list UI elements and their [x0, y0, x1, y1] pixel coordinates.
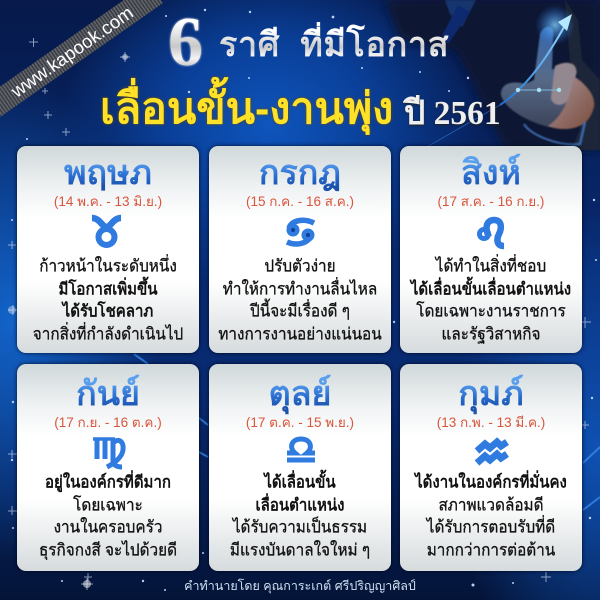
sign name	[209, 150, 391, 196]
description: ทางการงานอย่างแน่นอน	[218, 325, 382, 343]
icon: cancer	[286, 218, 316, 247]
description: สภาพแวดล้อมดี	[438, 496, 544, 515]
watermark ribbon	[0, 0, 163, 120]
description: ปีนี้จะมีเรื่องดี ๆ	[250, 302, 350, 321]
description: ได้เลื่อนขั้น	[264, 473, 336, 492]
sign name	[209, 371, 391, 417]
sign name	[17, 371, 199, 417]
panel: กุมภ์	[400, 364, 582, 571]
description: ก้าวหน้าในระดับหนึ่ง	[39, 257, 177, 275]
description: มีแรงบันดาลใจใหม่ ๆ	[230, 541, 370, 560]
description: จากสิ่งที่กำลังดำเนินไป	[33, 325, 183, 343]
sign name: สิงห์	[461, 154, 521, 192]
date range: (17 ก.ย. - 16 ต.ค.)	[54, 415, 162, 430]
title line 2: ปี 2561	[404, 95, 501, 132]
sign name	[17, 150, 199, 196]
icon: taurus	[92, 214, 121, 248]
description	[414, 470, 567, 560]
date range: (15 ก.ค. - 16 ส.ค.)	[246, 194, 354, 209]
panel: ตุลย์	[209, 364, 391, 571]
description: ได้รับความเป็นธรรม	[233, 519, 367, 537]
title line 2	[100, 74, 501, 138]
description: โดยเฉพาะ	[73, 496, 143, 515]
panel: พฤษภ	[17, 146, 199, 353]
icon: aquarius	[474, 437, 509, 466]
description	[33, 254, 183, 343]
panel: กรกฎ	[209, 146, 391, 353]
description: งานในครอบครัว	[54, 519, 162, 537]
date range: (13 ก.พ. - 13 มี.ค.)	[437, 415, 545, 430]
sign name: กุมภ์	[458, 375, 524, 413]
date range: (14 พ.ค. - 13 มิ.ย.)	[54, 194, 162, 209]
description: ได้งานในองค์กรที่มั่นคง	[415, 473, 567, 492]
sign name: กรกฎ	[259, 154, 341, 192]
panel: กันย์	[17, 364, 199, 571]
description: มากกว่าการต่อต้าน	[427, 541, 555, 560]
title line 1: ราศี ที่มีโอกาส	[219, 26, 449, 64]
description: โดยเฉพาะงานราชการ	[416, 302, 566, 321]
description: ได้ทำในสิ่งที่ชอบ	[436, 257, 546, 275]
description: ได้เลื่อนขั้นเลื่อนตำแหน่ง	[411, 279, 571, 298]
title line 1: 6	[168, 4, 203, 81]
sign name	[400, 371, 582, 417]
panel: สิงห์	[400, 146, 582, 353]
description	[218, 257, 382, 343]
sign name	[400, 150, 582, 196]
description: มีโอกาสเพิ่มขึ้น	[58, 279, 158, 298]
description: ทำให้การทำงานลื่นไหล	[223, 279, 377, 298]
date range: (17 ส.ค. - 16 ก.ย.)	[438, 194, 544, 209]
icon: leo	[477, 216, 504, 250]
title line 1	[168, 4, 449, 81]
sign name: กันย์	[76, 375, 140, 413]
sign name: พฤษภ	[64, 154, 152, 192]
description: เลื่อนตำแหน่ง	[256, 496, 344, 515]
description: และรัฐวิสาหกิจ	[442, 325, 540, 343]
icon: virgo	[93, 437, 126, 470]
description: ได้รับการตอบรับที่ดี	[427, 519, 555, 537]
date range: (17 ต.ค. - 15 พ.ย.)	[246, 415, 354, 430]
credit footer: คำทำนายโดย คุณการะเกต์ ศรีปริญญาศิลป์	[184, 579, 416, 593]
description	[410, 254, 571, 344]
icon: libra	[287, 436, 315, 462]
description: ธุรกิจกงสี จะไปด้วยดี	[39, 541, 177, 560]
description: ปรับตัวง่าย	[264, 257, 336, 275]
watermark ribbon: www.kapook.com	[7, 2, 137, 101]
description	[230, 470, 370, 560]
description: อยู่ในองค์กรที่ดีมาก	[45, 473, 171, 492]
sign name: ตุลย์	[269, 375, 331, 413]
title line 2: เลื่อนขั้น-งานพุ่ง	[100, 85, 393, 133]
description	[39, 470, 177, 560]
description: ได้รับโชคลาภ	[63, 302, 153, 321]
